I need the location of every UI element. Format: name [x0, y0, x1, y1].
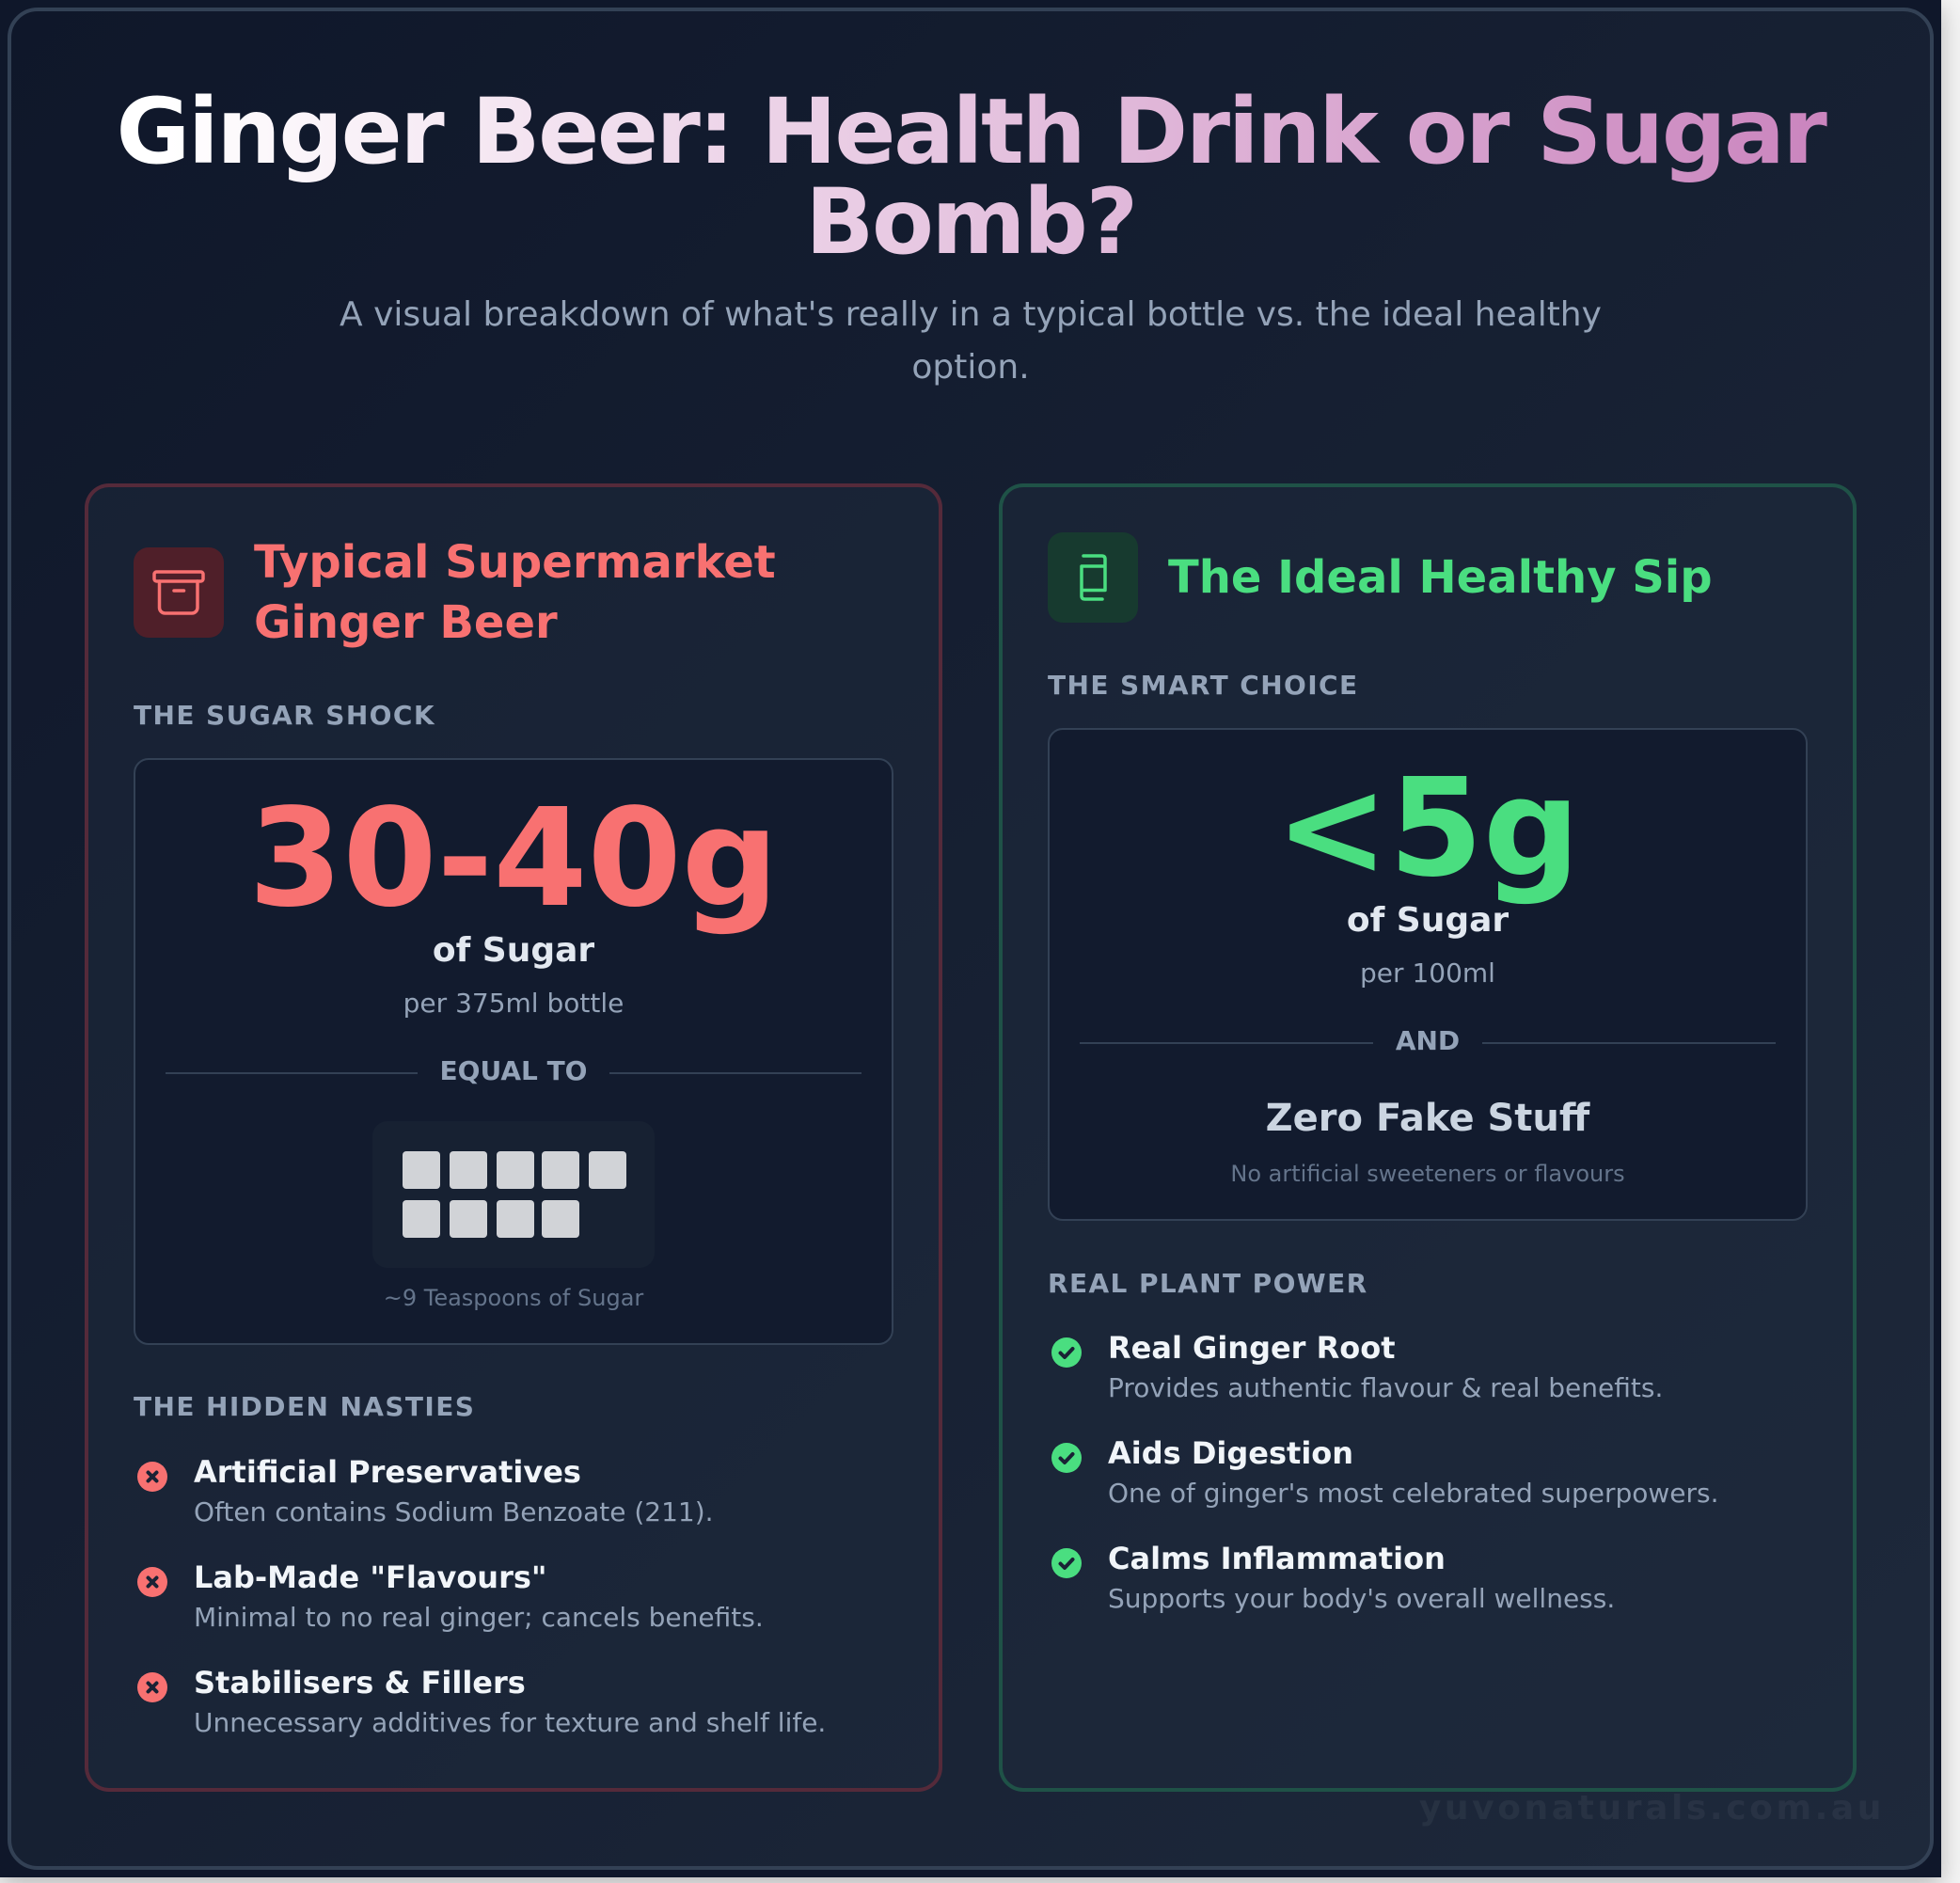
panel heading: The Ideal Healthy Sip [1168, 551, 1713, 604]
cube row one [403, 1151, 626, 1189]
panel heading: Ginger Beer [254, 596, 558, 649]
icon: check [1051, 1548, 1082, 1578]
watermark: yuvonaturals.com.au [1419, 1789, 1885, 1828]
list item: calms inflammation [1051, 1541, 1615, 1614]
sugar cube tray [372, 1121, 655, 1268]
item text: Supports your body's overall wellness. [1108, 1583, 1615, 1614]
divider: and: AND [1396, 1025, 1460, 1056]
item title: Real Ginger Root [1108, 1330, 1396, 1366]
list item: artificial preservatives [137, 1454, 714, 1527]
title: Bomb? [805, 169, 1136, 275]
item title: Artificial Preservatives [194, 1454, 581, 1490]
list item: stabilisers and fillers [137, 1665, 826, 1738]
list item: aids digestion [1051, 1435, 1719, 1509]
stat: under 5g: <5g [1275, 749, 1580, 907]
stat qualifier: per 375ml bottle [403, 988, 624, 1019]
icon: bottle [1048, 532, 1138, 623]
teaspoon caption: ~9 Teaspoons of Sugar [384, 1285, 643, 1311]
panel heading [254, 536, 776, 649]
stat box: sugar shock [134, 758, 893, 1345]
panel: typical supermarket ginger beer [85, 483, 942, 1792]
title: Ginger Beer: Health Drink or Sugar [117, 79, 1825, 184]
zero fake stuff: Zero Fake Stuff [1266, 1097, 1589, 1140]
item text: Unnecessary additives for texture and shelf life. [194, 1707, 826, 1738]
item text: Minimal to no real ginger; cancels benefits. [194, 1602, 764, 1633]
label: the sugar shock: THE SUGAR SHOCK [134, 700, 435, 731]
item title: Calms Inflammation [1108, 1541, 1446, 1576]
cube row two [403, 1200, 579, 1238]
item title: Lab-Made "Flavours" [194, 1559, 547, 1595]
label: real plant power: REAL PLANT POWER [1048, 1268, 1368, 1299]
list item: real ginger root [1051, 1330, 1663, 1403]
subtitle: option. [911, 348, 1030, 387]
icon: check [1051, 1443, 1082, 1473]
stat box: smart choice [1048, 728, 1808, 1221]
icon: cross [137, 1567, 167, 1597]
stat qualifier: per 100ml [1360, 957, 1495, 989]
title [11, 87, 1930, 267]
no artificial caption: No artificial sweeteners or flavours [1230, 1161, 1625, 1187]
list item: lab-made flavours [137, 1559, 764, 1633]
item text: Often contains Sodium Benzoate (211). [194, 1496, 714, 1527]
stat unit: of Sugar [1347, 901, 1509, 940]
stat unit: of Sugar [433, 931, 594, 970]
subtitle [340, 295, 1602, 387]
subtitle: A visual breakdown of what's really in a typical bottle vs. the ideal healthy [340, 295, 1602, 334]
icon: cross [137, 1672, 167, 1702]
item text: Provides authentic flavour & real benefits. [1108, 1372, 1663, 1403]
icon: cross [137, 1462, 167, 1492]
divider: equal to: EQUAL TO [440, 1055, 587, 1086]
item title: Stabilisers & Fillers [194, 1665, 526, 1701]
panel heading: Typical Supermarket [254, 536, 776, 589]
label: the hidden nasties: THE HIDDEN NASTIES [134, 1391, 475, 1422]
panel: ideal healthy sip [999, 483, 1857, 1792]
icon: check [1051, 1337, 1082, 1368]
item text: One of ginger's most celebrated superpowers. [1108, 1478, 1719, 1509]
item title: Aids Digestion [1108, 1435, 1353, 1471]
icon: archive box [134, 547, 224, 638]
label: the smart choice: THE SMART CHOICE [1048, 670, 1359, 701]
stat: 30-40g: 30-40g [248, 779, 779, 937]
